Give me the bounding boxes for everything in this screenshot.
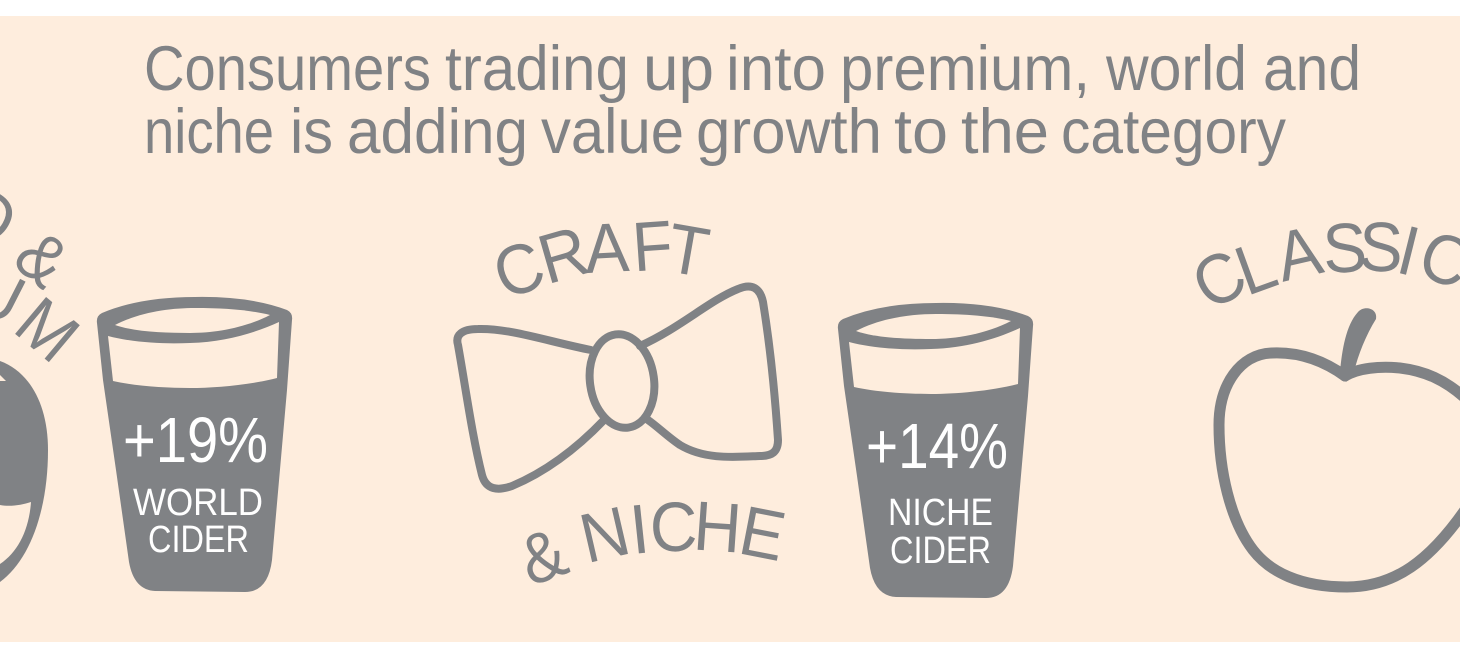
label: niche cider: CIDER — [890, 530, 991, 572]
cropped premium label — [0, 172, 93, 377]
icon: cropped filled apple — [0, 361, 48, 582]
label: craft — [484, 207, 715, 315]
label: classic: C — [1180, 235, 1259, 325]
cropped premium label: & — [0, 216, 84, 303]
heading: value — [541, 97, 684, 167]
label: classic: L — [1226, 226, 1286, 311]
label: craft: C — [484, 226, 555, 315]
heading: premium, — [840, 34, 1090, 104]
label: craft: T — [662, 210, 715, 293]
label: and niche: N — [573, 492, 637, 578]
label: craft: R — [530, 212, 597, 299]
label: and niche — [509, 488, 791, 601]
heading: and — [1263, 34, 1361, 104]
label: and niche: C — [649, 489, 698, 567]
heading: is — [290, 97, 333, 167]
label: classic: S — [1321, 209, 1369, 289]
label: classic: A — [1269, 212, 1330, 297]
heading: to — [894, 97, 948, 167]
label: and niche: E — [734, 492, 791, 576]
icon: bow tie — [457, 287, 778, 489]
label: craft: A — [583, 209, 631, 289]
cropped premium label: M — [1, 283, 93, 377]
heading: up — [643, 34, 714, 104]
heading: trading — [445, 34, 629, 104]
heading: niche — [144, 97, 274, 167]
heading: adding — [347, 97, 528, 167]
heading: category — [1061, 97, 1286, 167]
value: +19%: +19% — [123, 404, 268, 476]
label: classic — [1180, 208, 1460, 325]
value: +14%: +14% — [866, 410, 1008, 482]
heading — [144, 34, 1361, 167]
label: world cider — [133, 482, 263, 561]
label: classic: I — [1390, 212, 1427, 291]
label: world cider: WORLD — [133, 482, 263, 524]
heading: world — [1105, 34, 1247, 104]
label: and niche: & — [509, 513, 577, 601]
label: and niche: H — [691, 488, 744, 568]
heading: Consumers — [144, 34, 431, 104]
heading: into — [726, 34, 826, 104]
heading: growth — [696, 97, 882, 167]
label: niche cider — [888, 492, 993, 572]
heading: the — [961, 97, 1049, 167]
label: craft: F — [630, 207, 675, 287]
label: and niche: I — [626, 491, 653, 569]
glass: niche cider — [838, 303, 1033, 598]
glass: world cider — [97, 297, 292, 592]
label: classic: S — [1358, 208, 1404, 287]
label: world cider: CIDER — [148, 519, 249, 561]
label: niche cider: NICHE — [888, 492, 993, 534]
icon: outline apple — [1219, 308, 1460, 587]
